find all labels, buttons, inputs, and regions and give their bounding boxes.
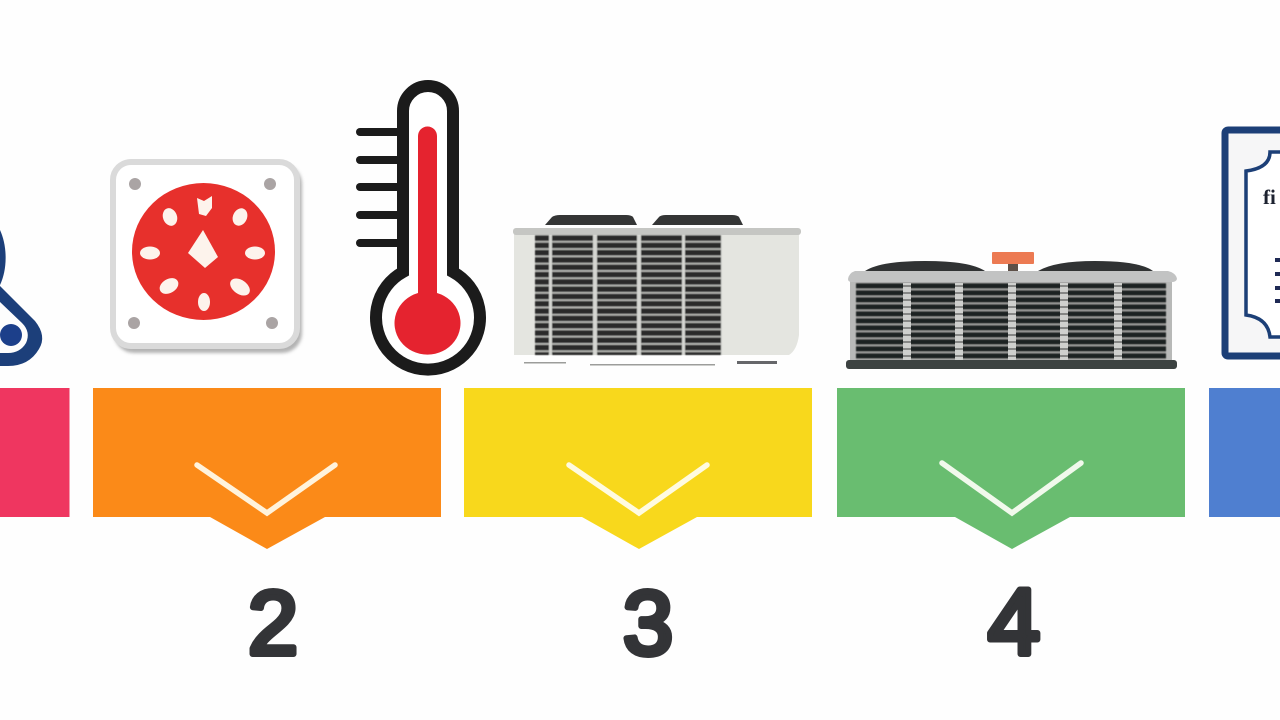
banner: step 2 orange: [93, 388, 441, 549]
fan covers: [545, 215, 637, 225]
mercury: [395, 126, 461, 355]
banner: step 4 green: [837, 388, 1185, 549]
chevron: [942, 463, 1081, 513]
posts: [903, 283, 1122, 360]
number: 4: 4: [988, 569, 1040, 674]
casing: [514, 233, 799, 355]
icon: wrench fragment, step 1: [0, 230, 42, 366]
scale ticks: [360, 132, 400, 243]
top cap: [513, 228, 801, 235]
icon: red fan panel: [113, 162, 302, 353]
grille: [535, 235, 722, 355]
louvres: [856, 283, 1166, 360]
banner: step 1 pink: [0, 388, 70, 517]
chevron: [197, 465, 335, 513]
scalloped inner frame: [1246, 152, 1280, 337]
fan openings: [140, 196, 265, 311]
number: 3: 3: [623, 574, 673, 674]
screws: [128, 178, 278, 329]
fan disc: [132, 183, 275, 320]
base: [846, 360, 1177, 369]
orange valve: [1008, 262, 1018, 272]
certificate title: fi: [1263, 185, 1276, 209]
top rail: [848, 271, 1177, 282]
base line: [524, 361, 777, 366]
glass outline: [376, 86, 480, 370]
card shadow: [114, 164, 302, 353]
outer frame: [1225, 130, 1280, 356]
banner: step 5 blue: [1209, 388, 1280, 517]
icon: thermometer: [360, 86, 480, 370]
certificate lines: [1275, 258, 1280, 303]
icon: air conditioner unit, step 3: [513, 215, 801, 366]
banner: step 3 yellow: [464, 388, 812, 549]
chevron: [569, 465, 707, 513]
body: [850, 281, 1172, 361]
fan domes: [865, 261, 985, 271]
icon: certificate fragment, step 5: [1225, 130, 1280, 356]
card: [113, 162, 297, 346]
number: 2: 2: [248, 574, 298, 674]
icon: condenser unit, step 4: [846, 252, 1177, 369]
